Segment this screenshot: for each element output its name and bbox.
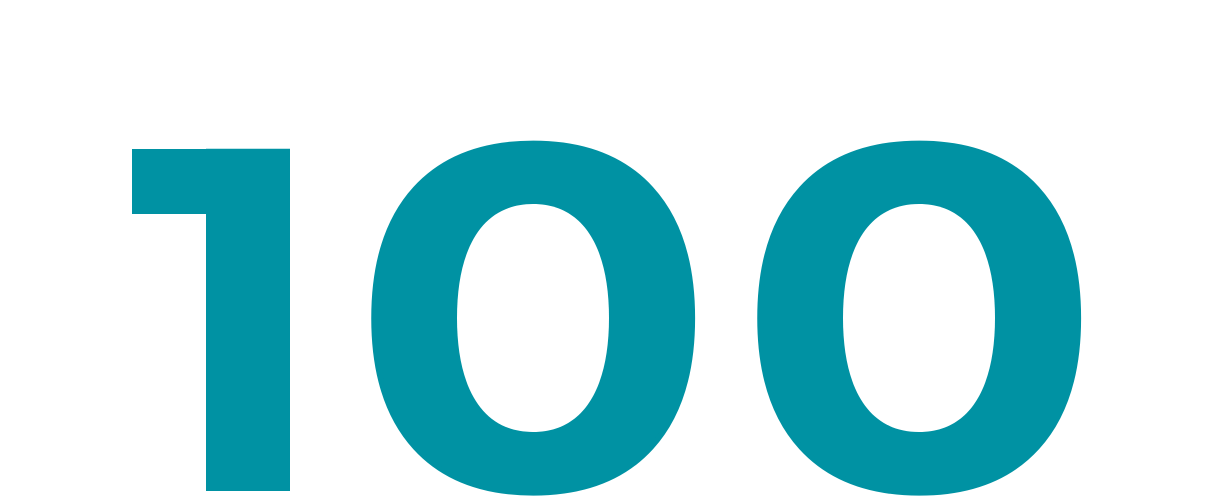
big number: 100 — [132, 140, 1082, 496]
digit 1 — [132, 148, 290, 491]
